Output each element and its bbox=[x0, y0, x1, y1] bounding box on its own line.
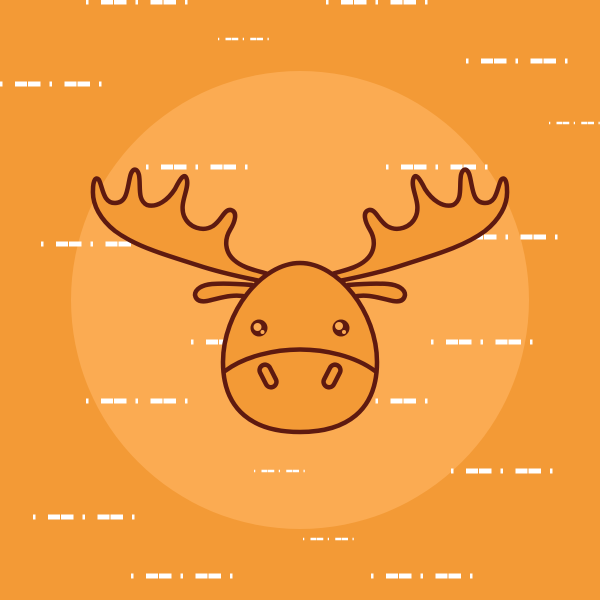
background circle bbox=[71, 71, 529, 529]
head bbox=[223, 263, 377, 432]
right nostril bbox=[322, 363, 342, 389]
right ear bbox=[348, 284, 405, 301]
right antler bbox=[332, 170, 507, 282]
left ear bbox=[195, 284, 252, 301]
moose bbox=[93, 170, 507, 432]
right eye bbox=[332, 320, 350, 336]
muzzle line bbox=[225, 350, 375, 371]
left antler bbox=[93, 170, 268, 282]
left nostril bbox=[258, 363, 278, 389]
left eye bbox=[250, 320, 268, 336]
